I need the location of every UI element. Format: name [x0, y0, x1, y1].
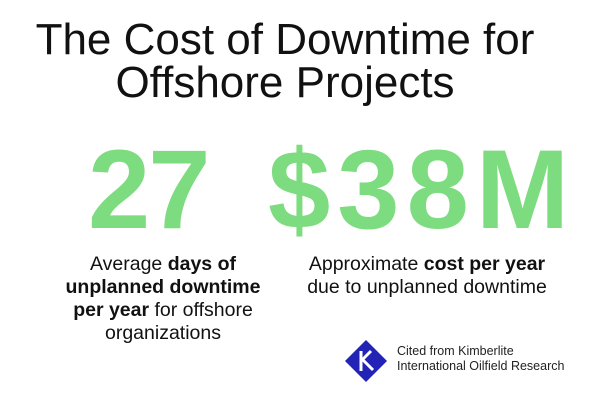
text: cost description: due to unplanned downtime [307, 276, 547, 298]
text: days description: Average days of [90, 253, 236, 275]
text: cost description: Approximate cost per year [309, 253, 545, 275]
title: The Cost of Downtime for [36, 15, 534, 64]
stat: $38M: $38M [268, 127, 576, 252]
text: days description: unplanned downtime [66, 276, 260, 298]
text: days description: organizations [105, 322, 221, 344]
stat: 27 days: 27 [88, 127, 209, 252]
text: days description: per year for offshore [73, 299, 253, 321]
citation text [397, 344, 564, 373]
citation text: Cited from Kimberlite [397, 344, 514, 358]
text: cost description [307, 253, 547, 298]
logo: Kimberlite [345, 340, 387, 382]
text: days description [66, 253, 260, 344]
citation text: International Oilfield Research [397, 359, 564, 373]
title [36, 15, 534, 107]
title: Offshore Projects [115, 58, 455, 107]
